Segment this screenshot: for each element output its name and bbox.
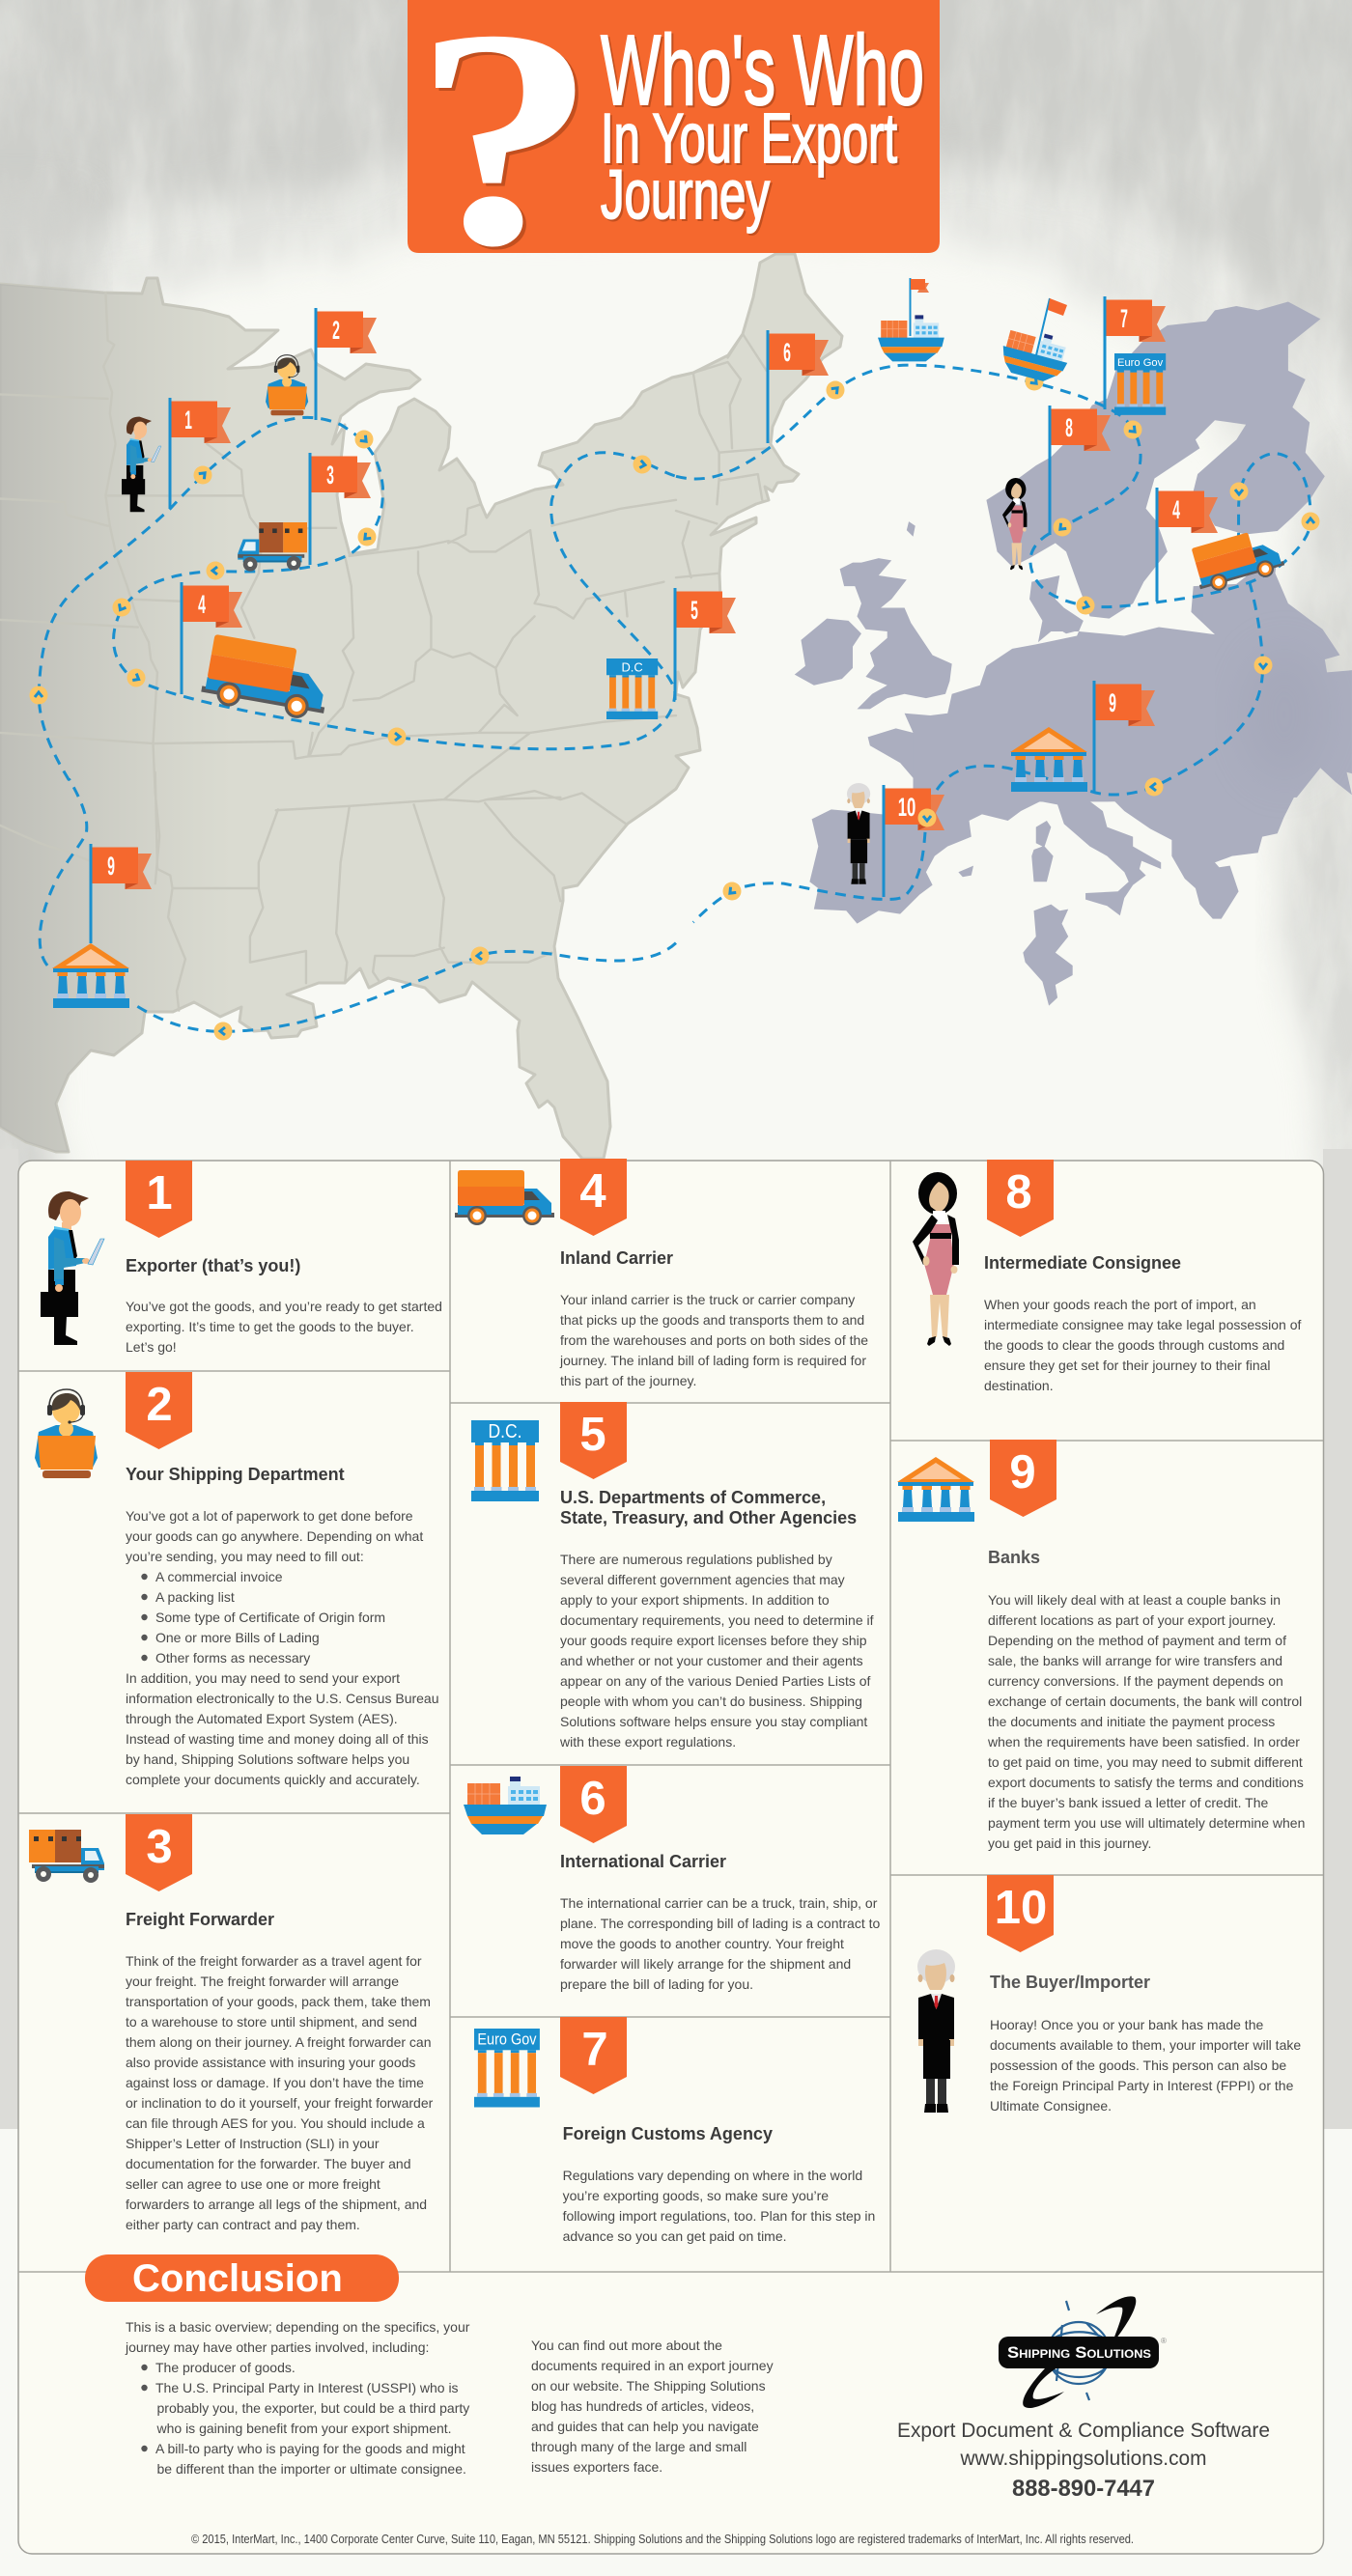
conclusion text: The U.S. Principal Party in Interest (USSPI) who is <box>155 2380 459 2395</box>
state borders, upper map <box>0 294 676 883</box>
body text: that picks up the goods and transports them to and <box>560 1312 864 1328</box>
title text: In Your Export <box>601 100 897 178</box>
body text: sale, the banks will arrange for wire transfers and <box>988 1653 1282 1668</box>
body text: your goods require export licenses before they ship <box>560 1633 867 1648</box>
map flag 7: 7 <box>1120 304 1128 333</box>
body text: Let’s go! <box>126 1339 177 1355</box>
icon: truck <box>455 1170 554 1225</box>
conclusion text: A bill-to party who is paying for the goods and might <box>155 2441 465 2456</box>
body text: One or more Bills of Lading <box>155 1630 320 1645</box>
body text: You will likely deal with at least a couple banks in <box>988 1592 1281 1608</box>
body text: if the buyer’s bank issued a letter of credit. The <box>988 1795 1268 1810</box>
map flag 6: 6 <box>783 338 791 367</box>
route direction markers <box>29 369 1319 1041</box>
map icon: inland truck <box>200 633 334 723</box>
body text: can file through AES for you. You should include a <box>126 2115 425 2131</box>
body text: Shipper’s Letter of Instruction (SLI) in your <box>126 2136 380 2151</box>
body text: ensure they get set for their journey to their final <box>984 1358 1271 1373</box>
map: North America <box>0 254 842 1168</box>
body text: The international carrier can be a truck, train, ship, or <box>560 1895 878 1911</box>
map flag 2: 2 <box>332 316 340 345</box>
website note: blog has hundreds of articles, videos, <box>531 2398 754 2414</box>
body text: apply to your export shipments. In addition to <box>560 1592 830 1608</box>
body text: transportation of your goods, pack them, take them <box>126 1994 431 2009</box>
logo: Shipping Solutions: ® <box>1161 2337 1167 2345</box>
map icon: buyer <box>847 783 870 884</box>
footer copyright: © 2015, InterMart, Inc., 1400 Corporate Center Curve, Suite 110, Eagan, MN 55121. Shipping Solutions and the Shipping Solutions logo are registered trademarks of InterMart, Inc. All rights reserved. <box>191 2533 1134 2546</box>
heading: The Buyer/Importer <box>990 1973 1150 1992</box>
body text: to get paid on time, you may need to submit different <box>988 1754 1303 1770</box>
southern Europe and islands <box>809 724 1352 1006</box>
map flag 5: 5 <box>690 596 698 625</box>
body text: exchange of certain documents, the bank will control <box>988 1694 1302 1709</box>
contact details: www.shippingsolutions.com <box>960 2447 1207 2470</box>
conclusion text: be different than the importer or ultimate consignee. <box>156 2461 466 2477</box>
shading on eastern Europe <box>1241 647 1328 782</box>
body text: with these export regulations. <box>559 1734 736 1750</box>
map flag 10 <box>883 785 944 897</box>
body text: different locations as part of your export journey. <box>988 1612 1276 1628</box>
map flag 9, Europe: 9 <box>1109 688 1116 717</box>
conclusion text: This is a basic overview; depending on the specifics, your <box>126 2319 470 2335</box>
body text: When your goods reach the port of import, an <box>984 1297 1256 1312</box>
map flag 3 <box>309 453 371 565</box>
conclusion section <box>85 2254 1270 2546</box>
map flag 4, Europe <box>1155 488 1218 602</box>
card 10: buyer <box>917 1875 1301 2114</box>
map icon: European truck <box>1189 525 1286 596</box>
body text: Instead of wasting time and money doing all of this <box>126 1731 429 1747</box>
conclusion text: who is gaining benefit from your export shipment. <box>156 2421 452 2436</box>
state borders, north-east <box>676 334 769 577</box>
body text: seller can agree to use one or more freight <box>126 2176 380 2192</box>
body text: intermediate consignee may take legal possession of <box>984 1317 1302 1332</box>
logo: Shipping Solutions: Shipping Solutions <box>1007 2343 1151 2362</box>
title text: Journey <box>601 157 770 234</box>
body text: A packing list <box>155 1589 235 1605</box>
map flag 3: 3 <box>326 461 334 490</box>
map: Europe <box>795 301 1352 1006</box>
map flag 8 <box>1049 406 1111 535</box>
website note: on our website. The Shipping Solutions <box>531 2378 766 2394</box>
map icon: ship with flag <box>878 278 944 361</box>
body text: Solutions software helps ensure you stay compliant <box>560 1714 867 1729</box>
body text: documents available to them, your importer will take <box>990 2037 1301 2053</box>
website note: documents required in an export journey <box>531 2358 774 2373</box>
body text: Regulations vary depending on where in the world <box>563 2168 862 2183</box>
conclusion heading pill: Conclusion <box>132 2257 343 2300</box>
heading: Inland Carrier <box>560 1248 673 1268</box>
body text: information electronically to the U.S. Census Bureau <box>126 1691 438 1706</box>
icon: exporter <box>41 1191 104 1345</box>
map flag 1 <box>168 398 231 509</box>
body text: from the warehouses and ports on both sides of the <box>560 1332 868 1348</box>
contact details: Export Document & Compliance Software <box>897 2419 1270 2442</box>
body text: also provide assistance with insuring your goods <box>126 2055 415 2070</box>
map icon: shipping department <box>266 355 308 415</box>
body text: you get paid in this journey. <box>988 1835 1151 1851</box>
heading: Freight Forwarder <box>126 1910 274 1929</box>
map flag 8: 8 <box>1065 413 1073 442</box>
body text: and whether or not your customer and their agents <box>560 1653 863 1668</box>
body text: documentation for the forwarder. The buyer and <box>126 2156 410 2171</box>
website note: You can find out more about the <box>531 2338 722 2353</box>
Scandinavia and the British Isles <box>795 301 1352 801</box>
badge 8 <box>987 1160 1054 1237</box>
heading: Banks <box>988 1548 1040 1567</box>
body text: documentary requirements, you need to determine if <box>560 1612 874 1628</box>
body text: you’re exporting goods, so make sure you’re <box>563 2188 829 2203</box>
badge 1 <box>126 1161 192 1238</box>
icon: D.C. building: D.C. <box>489 1421 521 1442</box>
map icon: D.C. building <box>606 658 658 719</box>
icon: D.C. building <box>471 1420 539 1501</box>
map flag 2 <box>315 308 377 420</box>
card 8: intermediate consignee <box>913 1160 1302 1393</box>
body text: by hand, Shipping Solutions software helps you <box>126 1751 409 1767</box>
map icon: Euro Gov building <box>1114 353 1166 415</box>
body text: or inclination to do it yourself, your freight forwarder <box>126 2095 434 2111</box>
body text: you’re sending, you may need to fill out: <box>126 1549 364 1564</box>
card 5: US departments <box>471 1402 874 1750</box>
title banner <box>408 0 940 310</box>
conclusion text: The producer of goods. <box>155 2360 296 2375</box>
body text: them along on their journey. A freight forwarder can <box>126 2034 431 2050</box>
body text: prepare the bill of lading for you. <box>560 1976 753 1992</box>
card 4: inland carrier <box>455 1159 868 1388</box>
body text: your goods can go anywhere. Depending on what <box>126 1528 423 1544</box>
body text: the documents and initiate the payment process <box>988 1714 1275 1729</box>
map icon: European bank <box>1010 727 1087 792</box>
heading: Exporter (that’s you!) <box>126 1256 300 1275</box>
map icon: tilted ship with flag <box>997 298 1073 386</box>
badge 10 <box>987 1875 1054 1952</box>
map flag 9, USA: 9 <box>107 852 115 881</box>
map flag 1: 1 <box>184 406 192 434</box>
body text: possession of the goods. This person can also be <box>990 2058 1286 2073</box>
badge 1: 1 <box>146 1167 173 1219</box>
contact details: 888-890-7447 <box>1012 2476 1155 2502</box>
badge 9 <box>990 1440 1056 1517</box>
body text: currency conversions. If the payment depends on <box>988 1673 1283 1689</box>
badge 5 <box>560 1402 627 1479</box>
state borders, south <box>155 772 560 1011</box>
body text: destination. <box>984 1378 1054 1393</box>
body text: payment term you use will ultimately determine when <box>988 1815 1305 1831</box>
heading: Intermediate Consignee <box>984 1253 1181 1273</box>
body text: this part of the journey. <box>560 1373 696 1388</box>
heading: State, Treasury, and Other Agencies <box>560 1508 857 1527</box>
icon: headset agent <box>35 1389 98 1478</box>
conclusion text: journey may have other parties involved, including: <box>125 2339 429 2355</box>
heading: International Carrier <box>560 1852 726 1871</box>
card 3: freight forwarder <box>29 1814 434 2232</box>
map flag 7 <box>1103 296 1166 409</box>
bullets <box>141 1574 148 1661</box>
badge 10: 10 <box>995 1882 1047 1934</box>
body text: journey. The inland bill of lading form is required for <box>559 1353 866 1368</box>
conclusion text: probably you, the exporter, but could be a third party <box>156 2400 469 2416</box>
body text: A commercial invoice <box>155 1569 283 1584</box>
icon: Euro Gov building <box>474 2029 540 2107</box>
map icon: US bank <box>52 943 129 1008</box>
body text: to a warehouse to store until shipment, and send <box>126 2014 417 2030</box>
icon: ship <box>464 1777 547 1834</box>
map icon: exporter <box>122 417 161 512</box>
map icon: intermediate consignee <box>1002 478 1027 570</box>
body text: through the Automated Export System (AES). <box>126 1711 398 1726</box>
body text: You’ve got a lot of paperwork to get done before <box>126 1508 413 1524</box>
map flag 4: 4 <box>198 590 206 619</box>
body text: either party can contract and pay them. <box>126 2217 360 2232</box>
body text: when the requirements have been satisfied. In order <box>987 1734 1300 1750</box>
map icon: D.C. building: D.C <box>621 660 643 674</box>
body text: people with whom you can’t do business. Shipping <box>560 1694 862 1709</box>
panel: who's who cards <box>18 1159 1323 2554</box>
body text: Some type of Certificate of Origin form <box>155 1610 385 1625</box>
badge 5: 5 <box>579 1409 606 1461</box>
map flag 4, Europe: 4 <box>1172 495 1180 524</box>
conclusion heading pill <box>85 2254 399 2302</box>
route marker on flag 10 <box>917 809 937 826</box>
body text: following import regulations, too. Plan for this step in <box>563 2208 875 2224</box>
heading: Your Shipping Department <box>126 1465 345 1484</box>
badge 4: 4 <box>579 1165 606 1218</box>
body text: Your inland carrier is the truck or carrier company <box>560 1292 855 1307</box>
card 1: exporter <box>41 1161 442 1355</box>
body text: the goods to clear the goods through customs and <box>984 1337 1284 1353</box>
body text: There are numerous regulations published by <box>560 1552 832 1567</box>
logo: Shipping Solutions <box>999 2296 1167 2408</box>
badge 8: 8 <box>1005 1166 1032 1218</box>
body text: against loss or damage. If you don’t have the time <box>126 2075 424 2090</box>
map flag 6 <box>767 330 829 443</box>
badge 3: 3 <box>146 1821 173 1873</box>
icon: bank <box>897 1457 974 1522</box>
body text: Other forms as necessary <box>155 1650 310 1666</box>
map icon: freight truck <box>238 522 307 572</box>
body text: Think of the freight forwarder as a travel agent for <box>126 1953 422 1969</box>
website note: through many of the large and small <box>531 2439 746 2454</box>
conclusion bullets <box>141 2365 148 2451</box>
badge 7 <box>560 2017 627 2094</box>
body text: advance so you can get paid on time. <box>563 2228 787 2244</box>
body text: complete your documents quickly and accurately. <box>126 1772 420 1787</box>
badge 7: 7 <box>581 2024 608 2076</box>
body text: forwarders to arrange all legs of the shipment, and <box>126 2197 427 2212</box>
body text: exporting. It’s time to get the goods to the buyer. <box>126 1319 414 1334</box>
heading: Foreign Customs Agency <box>563 2124 773 2143</box>
body text: plane. The corresponding bill of lading is a contract to <box>560 1916 880 1931</box>
body text: Hooray! Once you or your bank has made the <box>990 2017 1263 2032</box>
badge 4 <box>560 1159 627 1236</box>
badge 6: 6 <box>579 1773 606 1825</box>
website note: and guides that can help you navigate <box>531 2419 759 2434</box>
icon: freight truck <box>29 1830 104 1883</box>
card 2: shipping department <box>35 1372 438 1787</box>
body text: forwarder will likely arrange for the shipment and <box>560 1956 851 1972</box>
badge 9: 9 <box>1009 1446 1036 1498</box>
map flag 10: 10 <box>898 793 915 822</box>
badge 2: 2 <box>146 1379 173 1431</box>
map flag 5 <box>674 588 736 700</box>
icon: woman <box>913 1172 959 1346</box>
card 9: banks <box>897 1440 1305 1851</box>
body text: export documents to satisfy the terms and conditions <box>988 1775 1304 1790</box>
icon: Euro Gov building: Euro Gov <box>477 2030 537 2048</box>
body text: several different government agencies that may <box>560 1572 845 1587</box>
badge 3 <box>126 1814 192 1891</box>
badge 6 <box>560 1766 627 1843</box>
contact details <box>897 2419 1270 2502</box>
body text: move the goods to another country. Your freight <box>560 1936 844 1951</box>
card 7: foreign customs agency <box>474 2017 875 2244</box>
badge 2 <box>126 1372 192 1449</box>
title text: Who's Who <box>601 14 924 126</box>
icon: older man <box>917 1949 955 2113</box>
website note: issues exporters face. <box>531 2459 662 2475</box>
body text: the Foreign Principal Party in Interest (FPPI) or the <box>990 2078 1294 2093</box>
map flag 9, USA <box>89 844 152 943</box>
map icon: Euro Gov building: Euro Gov <box>1117 357 1163 369</box>
body text: appear on any of the various Denied Parties Lists of <box>560 1673 871 1689</box>
body text: your freight. The freight forwarder will arrange <box>126 1974 399 1989</box>
heading: U.S. Departments of Commerce, <box>560 1488 826 1507</box>
body text: In addition, you may need to send your export <box>126 1670 400 1686</box>
shipping route: dashed line <box>39 365 1310 1031</box>
title text <box>601 14 924 234</box>
body text: Depending on the method of payment and term of <box>988 1633 1286 1648</box>
map flag 4 <box>180 582 242 694</box>
body text: You’ve got the goods, and you’re ready to get started <box>126 1299 442 1314</box>
body text: Ultimate Consignee. <box>990 2098 1112 2114</box>
map flag 9, Europe <box>1093 681 1155 793</box>
card 6: international carrier <box>464 1766 880 1992</box>
